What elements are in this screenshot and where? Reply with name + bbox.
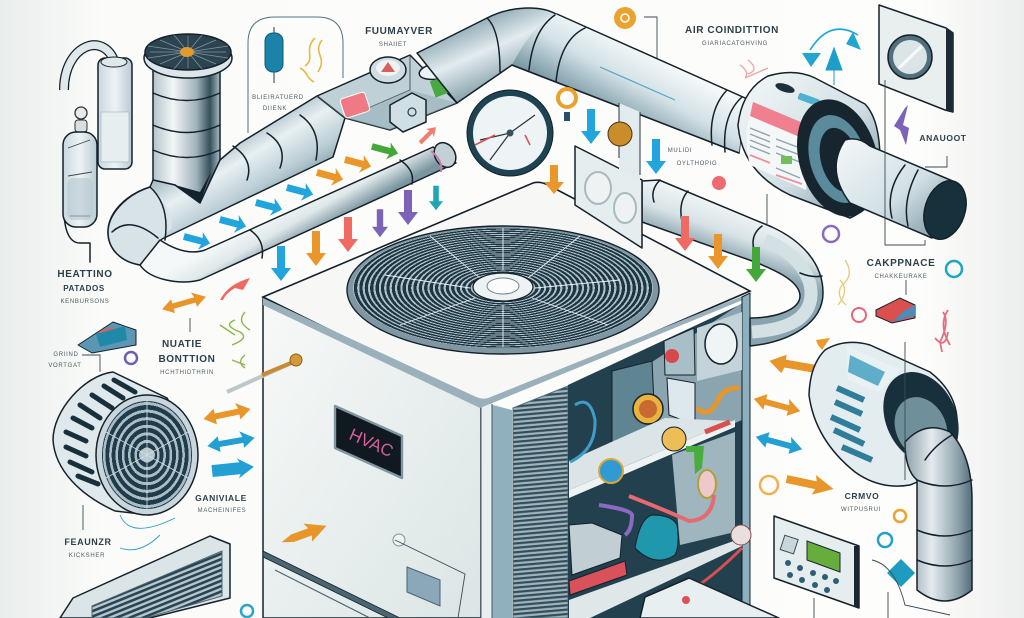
the HVAC unit	[263, 182, 750, 618]
label: nuatie bonttion: BONTTION	[158, 354, 216, 365]
HVAC badge: HVAC	[346, 425, 396, 461]
spec sheet	[746, 102, 808, 190]
control panel box	[612, 361, 655, 448]
outlet pipe	[836, 139, 973, 245]
keypad	[785, 560, 839, 593]
panel: refrigerant tanks	[63, 45, 132, 262]
label: fuumayver	[365, 26, 433, 48]
label: heating: PATADOS	[63, 284, 105, 293]
callout: refrigerant frame	[248, 17, 343, 133]
coins	[662, 427, 686, 451]
right strip	[742, 293, 750, 618]
label: heating: HEATTINO	[57, 269, 113, 280]
lower return pipe	[140, 139, 460, 282]
thermostat	[774, 516, 859, 608]
label: multi	[668, 148, 717, 167]
label: heating: KENBURSONS	[60, 299, 110, 305]
label: anauoot: ANAUOOT	[919, 133, 967, 143]
downward arrows left	[271, 186, 443, 281]
top face	[263, 182, 750, 404]
icon: green tag	[430, 75, 453, 98]
green strap	[686, 446, 704, 474]
label: feaunzr: KICKSHER	[69, 553, 105, 559]
panel: air conditioner cylinder	[738, 72, 892, 226]
main duct left section	[108, 96, 345, 265]
label: nuatie bonttion	[158, 339, 216, 376]
downward arrows right	[544, 109, 766, 282]
left face	[263, 298, 481, 618]
panel: chimney vent	[144, 34, 232, 203]
grille face	[513, 386, 568, 618]
label: air condition: GIARIACATGHVING	[702, 41, 768, 47]
icon: blue rotation arrows	[802, 29, 861, 85]
red component top right	[876, 298, 915, 323]
label: air condition: AIR COINDITTION	[685, 25, 779, 36]
label: crmvo	[841, 491, 881, 513]
shelf	[569, 418, 732, 490]
label: heating	[57, 269, 113, 305]
icon: amber coin with digit	[558, 89, 576, 121]
gold grate	[633, 394, 663, 424]
panel: right condenser drum	[809, 342, 973, 486]
label: refrigerated	[252, 95, 304, 112]
panel: swirl vent plate	[575, 103, 642, 248]
label: air condition	[685, 25, 779, 47]
blue coil	[570, 402, 595, 462]
teal dome	[635, 515, 678, 560]
label: nuatie bonttion: NUATIE	[162, 339, 202, 350]
label: grind: VORTGAT	[48, 363, 82, 369]
label: ganiviale: MACHEINIFES	[198, 508, 246, 514]
label: feaunzr	[64, 537, 112, 559]
label: multi: OYLTHOPIG	[677, 161, 717, 167]
icon: red label	[340, 91, 370, 119]
control box on duct	[317, 55, 457, 132]
label: cakppnace: CHAKKEURAKE	[874, 274, 928, 280]
icon: blue capsule	[265, 27, 283, 83]
icon: wall plate control	[879, 5, 953, 112]
red hose	[629, 495, 714, 521]
large pressure gauge	[467, 90, 553, 176]
lower seam	[275, 570, 370, 618]
side double arrows	[160, 278, 836, 552]
lower band	[263, 551, 400, 618]
return pipe right	[642, 180, 823, 346]
cavity back panel	[652, 303, 742, 460]
icon: brass fitting	[608, 122, 632, 146]
flow arrows on duct	[181, 123, 440, 252]
elbow duct downward	[905, 428, 972, 601]
fan hub	[473, 273, 533, 301]
label: crmvo: WITPUSRUI	[841, 507, 881, 513]
unit details: probe, button, nameplate	[227, 354, 465, 618]
corner strip	[481, 400, 512, 618]
icon: terminal cube	[390, 93, 426, 132]
label: grind: GRIIND	[53, 352, 79, 358]
panel: left fan unit	[53, 372, 198, 515]
small thermostat tag left	[78, 322, 136, 353]
lower panel	[672, 432, 735, 545]
fan grille on top	[347, 226, 659, 354]
label: multi: MULIDI	[668, 148, 692, 154]
dial gauge	[697, 312, 742, 381]
label: refrigerated: DIIENK	[263, 106, 287, 112]
HVAC badge	[335, 406, 402, 478]
icon: duct gauge	[370, 57, 406, 83]
label: cakppnace: CAKPPNACE	[867, 258, 935, 269]
icon: oval plate	[418, 60, 456, 82]
bottom tray	[569, 538, 742, 618]
label: feaunzr: FEAUNZR	[64, 537, 112, 547]
icon: yellow heat squiggle	[300, 38, 322, 82]
data sheet	[846, 345, 900, 392]
label: ganiviale	[195, 493, 247, 514]
upper duct elbow and straight run	[417, 8, 745, 153]
label: ganiviale: GANIVIALE	[195, 493, 247, 503]
label: fuumayver: SHAIIET	[379, 42, 407, 48]
internal components	[569, 312, 751, 618]
label: nuatie bonttion: HCHTHIDTHRIN	[160, 370, 214, 376]
label: crmvo: CRMVO	[845, 491, 879, 501]
label: fuumayver: FUUMAYVER	[365, 26, 433, 37]
label: cakppnace	[867, 258, 935, 280]
compressor	[569, 523, 622, 575]
label: refrigerated: BLIEIRATUERD	[252, 95, 304, 101]
bottom-left filter grille	[60, 536, 230, 618]
green display	[807, 541, 840, 572]
orange pipe	[697, 388, 739, 412]
lower outlet pipe	[640, 578, 779, 618]
internal cavity	[568, 300, 750, 618]
decorative marks: squiggles and clef	[220, 60, 950, 587]
label: grind	[48, 352, 82, 369]
